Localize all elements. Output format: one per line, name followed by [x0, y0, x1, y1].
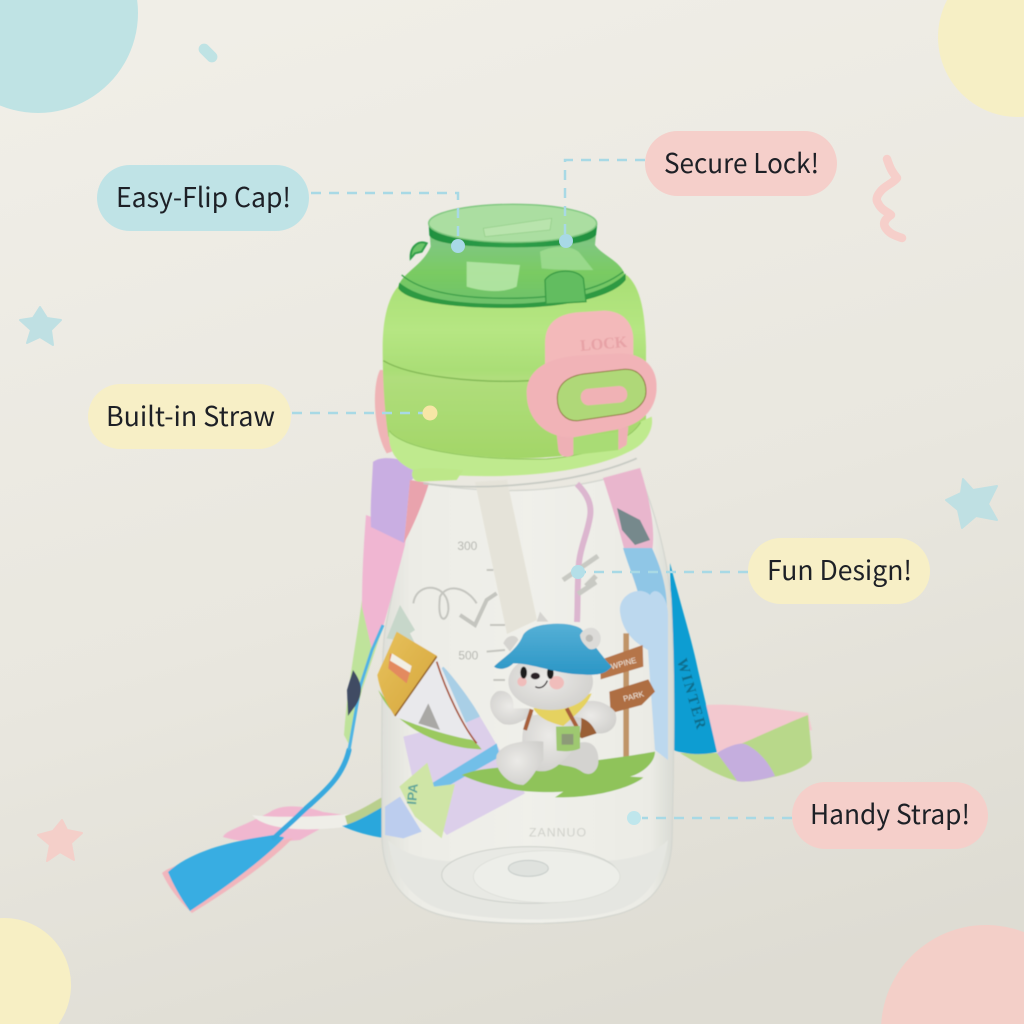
glass outline and fill	[382, 470, 674, 924]
label: Built-in Straw	[88, 384, 291, 449]
label: Easy-Flip Cap	[97, 165, 309, 231]
nose and mouth	[531, 673, 540, 679]
print layer	[377, 539, 655, 903]
mottled colour behind tent	[440, 667, 480, 727]
strap blue hanging	[670, 563, 717, 754]
text: Handy Strap!	[810, 793, 970, 832]
green flag through glass	[399, 763, 455, 838]
blue cloud print	[620, 591, 668, 760]
thin blue twist	[274, 750, 349, 838]
flag text: IPA	[404, 782, 421, 805]
strap text: WINTER	[673, 657, 709, 733]
tent white canvas	[395, 657, 473, 740]
left pink button	[375, 370, 397, 453]
squiggle: pink	[877, 159, 902, 238]
circle: bottom-left yellow	[0, 918, 71, 1024]
green cap body	[383, 275, 646, 459]
base ellipse	[442, 847, 618, 903]
sign text: WPINE	[610, 656, 637, 671]
lower sign	[609, 679, 655, 713]
lock upper tab	[545, 311, 633, 367]
strap: left upper ribbon	[344, 458, 429, 750]
blue edge	[349, 625, 383, 750]
circle: top-left teal	[0, 0, 138, 113]
lid	[398, 204, 626, 308]
rim lower band	[398, 273, 626, 308]
cheeks	[517, 677, 527, 686]
dark print on right strap	[617, 508, 650, 545]
strap: left lower loop on ground	[162, 750, 384, 913]
circle: top-right yellow	[938, 0, 1024, 117]
left arm	[490, 691, 533, 725]
text: Built-in Straw	[106, 395, 275, 434]
dark inner line	[402, 272, 623, 298]
collar ring	[389, 417, 652, 476]
grey ribbon marks near pointer	[563, 556, 598, 594]
purple ribbon through glass	[403, 717, 525, 835]
thin pink strap inside	[577, 484, 590, 622]
collar top shadow line	[389, 422, 641, 459]
label: Secure Lock	[645, 131, 837, 196]
label: Handy Strap	[792, 782, 988, 849]
dot: easy-flip cap	[451, 239, 465, 253]
pill	[97, 165, 309, 231]
cap seam	[383, 361, 530, 381]
pill	[645, 131, 837, 196]
white band	[252, 814, 352, 829]
latch	[545, 271, 586, 304]
dimple	[508, 860, 548, 876]
star: pink	[38, 820, 82, 861]
label: Fun Design	[748, 538, 930, 604]
cap assembly	[375, 204, 657, 487]
straw	[475, 480, 537, 634]
ear	[580, 628, 601, 649]
pink right strap inside	[603, 468, 653, 552]
connector: fun design	[584, 571, 748, 573]
blue right strap inside	[623, 548, 667, 640]
dot: secure lock	[559, 234, 573, 248]
grass	[462, 752, 655, 797]
strap front green	[680, 715, 812, 782]
inner pale patch right	[540, 247, 593, 270]
reflections lower	[388, 840, 668, 920]
dot: built-in straw	[422, 406, 438, 420]
inner green capsule	[557, 369, 646, 421]
dark print on ribbon	[347, 670, 361, 716]
connector: easy-flip cap	[311, 193, 458, 240]
post	[623, 633, 629, 760]
dome	[398, 209, 626, 307]
text: Fun Design!	[767, 549, 912, 588]
tent	[377, 632, 482, 749]
loop ring left	[412, 468, 463, 482]
tent ground	[378, 690, 482, 749]
tent roof patch	[388, 653, 412, 683]
back ear	[537, 612, 548, 622]
pouch buckle	[562, 734, 573, 745]
measuring marks	[413, 570, 505, 680]
upper sign	[600, 645, 643, 679]
upper scale number: 300	[457, 539, 478, 553]
purple top fold	[371, 458, 424, 543]
scale number: 500	[458, 648, 479, 662]
connector: secure lock	[565, 160, 645, 236]
tent roof	[377, 632, 437, 717]
bottle glass body	[377, 468, 674, 924]
hat	[494, 624, 612, 675]
strap back pink	[705, 705, 812, 752]
circle: bottom-right pink	[881, 925, 1024, 1024]
side handle	[411, 242, 427, 258]
right arm	[570, 701, 616, 734]
tent opening	[418, 703, 440, 730]
pill	[792, 782, 988, 849]
pill	[748, 538, 930, 604]
callout connectors	[292, 160, 792, 818]
capsule: small teal	[196, 41, 220, 65]
connector: built-in straw	[292, 412, 424, 414]
lock switch	[527, 311, 657, 457]
dot: handy strap	[627, 811, 641, 825]
bottle neck line	[423, 458, 637, 487]
bottle product photo	[162, 204, 812, 924]
base inner	[473, 851, 620, 903]
lock label: LOCK	[579, 334, 628, 355]
strap: right loop outside bottle	[670, 563, 812, 782]
straps	[525, 708, 577, 730]
head	[508, 653, 593, 710]
body	[522, 707, 581, 771]
inner pink capsule	[580, 385, 628, 406]
tent rope	[437, 662, 477, 743]
front leg	[496, 741, 543, 785]
pink underside	[162, 838, 293, 913]
bear	[490, 612, 616, 785]
blue ribbon end	[168, 835, 284, 911]
pink fold	[404, 480, 429, 543]
inner pale patch	[467, 262, 520, 291]
green section	[344, 600, 383, 748]
pink section	[362, 515, 407, 650]
blue lower through glass	[385, 797, 422, 838]
hinge pink right	[618, 427, 628, 450]
top disc	[429, 204, 597, 242]
strap purple patch	[717, 744, 775, 782]
bottle base	[442, 847, 620, 903]
callout dots	[422, 234, 641, 825]
tree	[387, 605, 415, 643]
star: teal right	[946, 479, 997, 528]
swirl logo	[413, 588, 477, 619]
text: Secure Lock!	[664, 142, 819, 181]
blue piece near bottle	[342, 806, 384, 838]
green pouch	[556, 726, 580, 751]
back pink loop	[223, 806, 345, 842]
blue strip through glass	[432, 743, 500, 793]
top disc window	[483, 218, 552, 237]
text: Easy-Flip Cap!	[116, 176, 291, 215]
green and purple edge	[345, 796, 384, 827]
connector: handy strap	[642, 817, 792, 819]
eyes	[520, 667, 527, 679]
yellow scarf	[533, 693, 592, 726]
sign text 2: PARK	[622, 689, 646, 704]
rim dark	[429, 223, 597, 247]
brand text: ZANNUO	[529, 826, 587, 840]
hinge green bar	[573, 432, 618, 455]
lock lower body	[527, 353, 657, 437]
pill	[88, 384, 291, 449]
signpost	[600, 633, 655, 760]
back leg	[557, 742, 598, 774]
hinge pink left	[557, 435, 575, 457]
backpack	[567, 713, 597, 738]
dot: fun design	[571, 565, 585, 579]
star: teal left	[20, 307, 61, 345]
